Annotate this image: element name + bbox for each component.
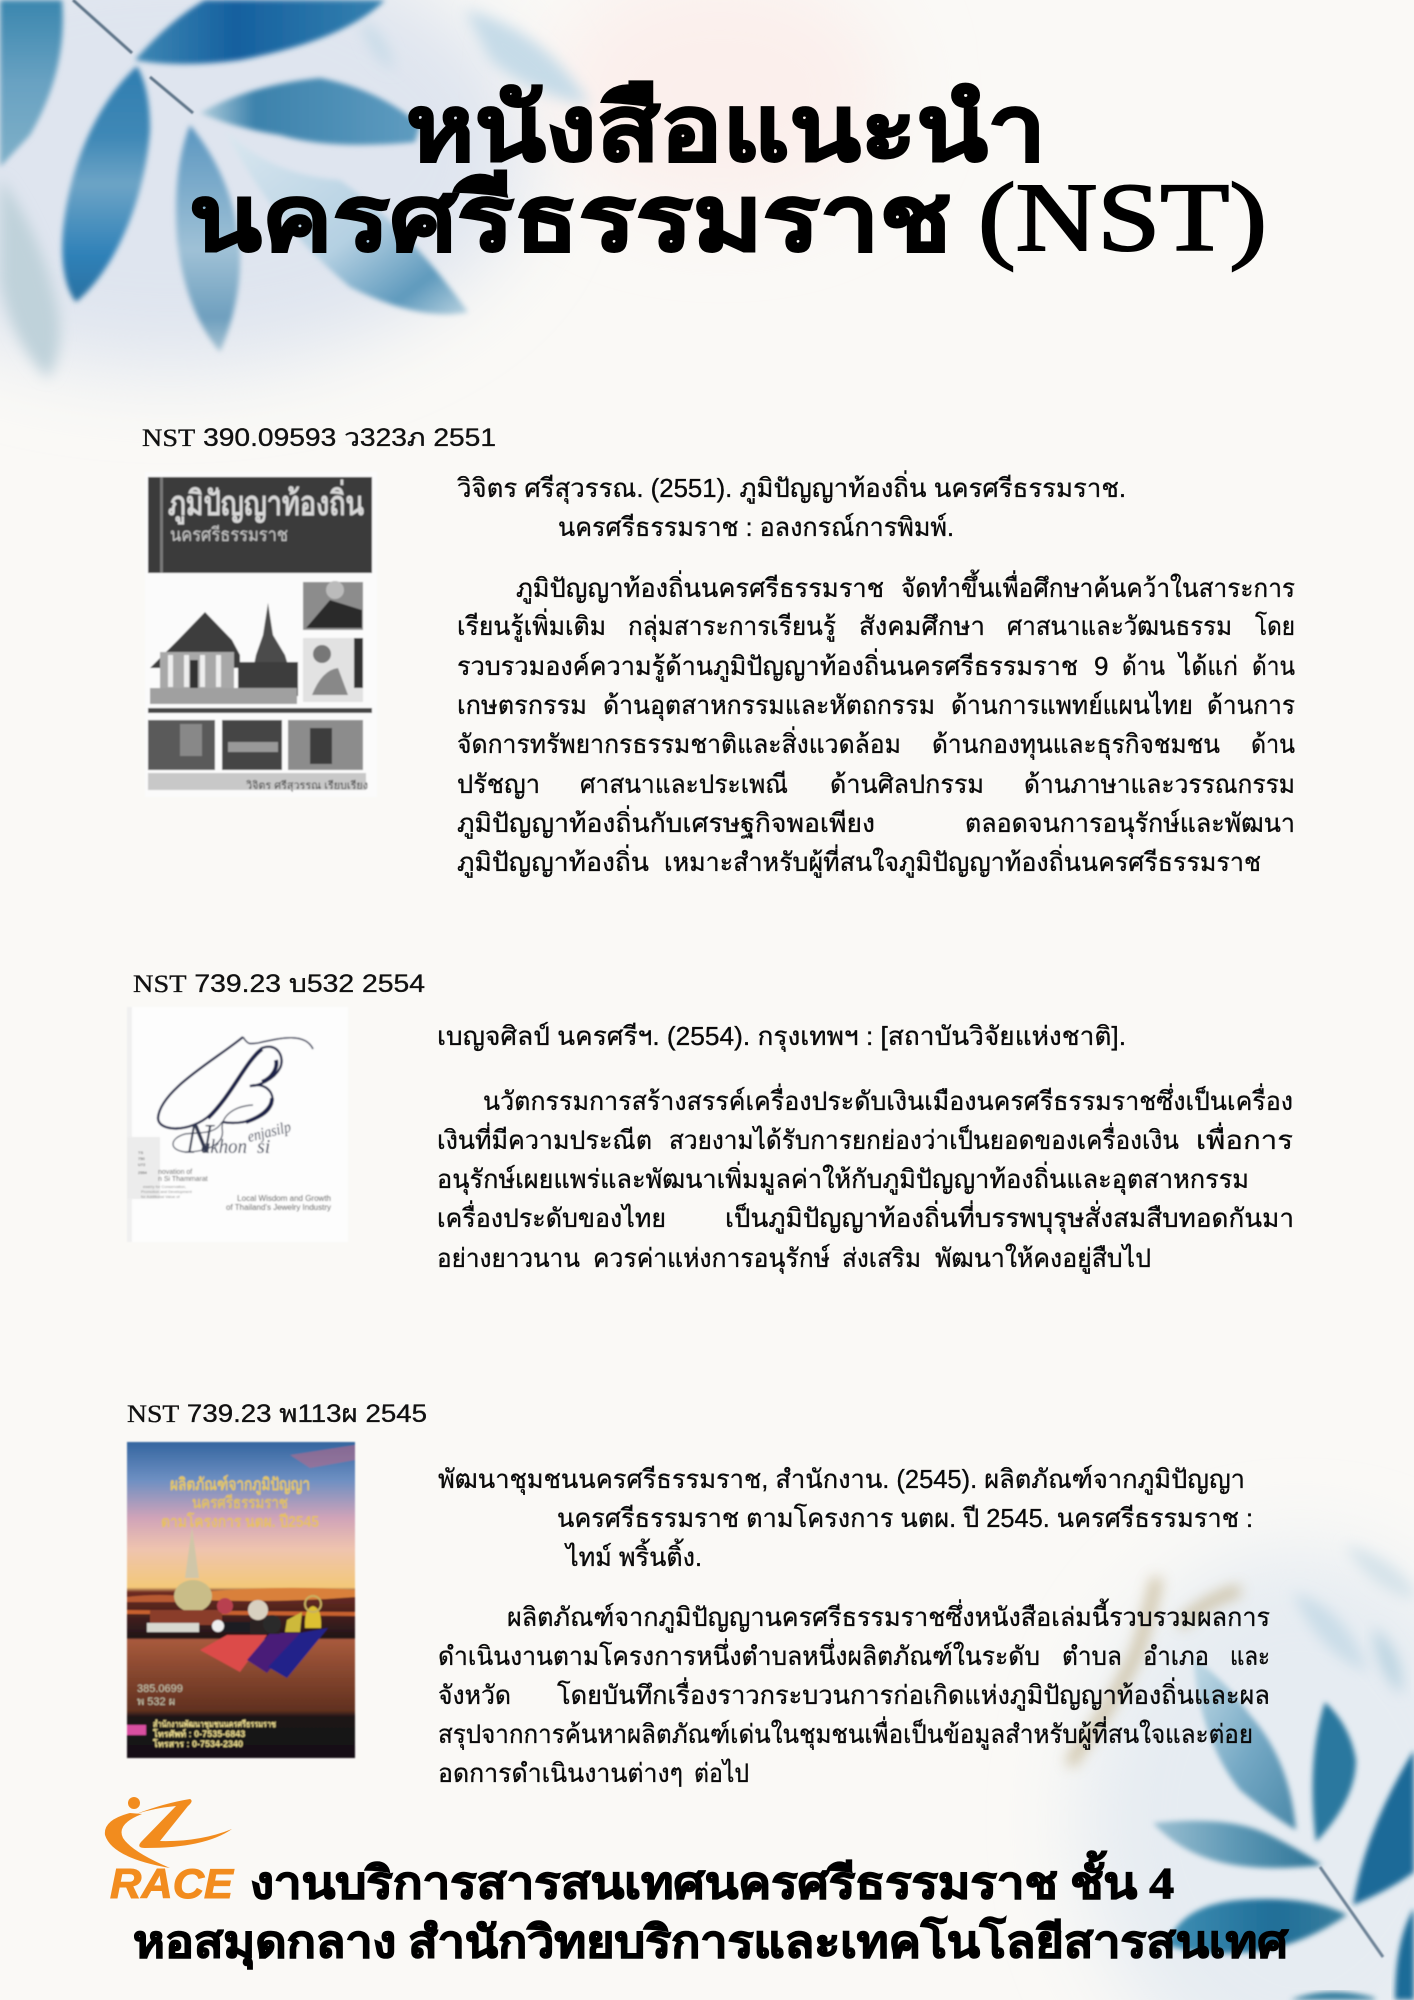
description: book 1: ด้านกองทุนและธุรกิจชมชน (932, 729, 1220, 760)
description: book 1: เกษตรกรรม (457, 690, 587, 720)
footer: library unit (133, 1850, 1289, 1970)
book cover 2: of Thailand's Jewelry Industry (226, 1203, 331, 1212)
description: book 1: ภูมิปัญญาท้องถิ่น (457, 844, 649, 878)
description: book 1: ด้าน (1251, 729, 1295, 759)
call number: book 2: NST 739.23 บ532 2554 (133, 970, 425, 998)
description: book 1: ด้านภาษาและวรรณกรรม (1024, 769, 1295, 799)
description: book 2: เงินที่มีความประณีต (437, 1122, 652, 1155)
description: book 3: ต่อไป (694, 1758, 749, 1788)
description: book 2: ควรค่าแห่งการอนุรักษ์ (593, 1243, 831, 1274)
description: book 3: ดำเนินงานตามโครงการหนึ่งตำบลหนึ่งผลิตภัณฑ์ในระดับ (438, 1638, 1040, 1671)
description: book 3: ตำบล (1062, 1641, 1122, 1671)
call number: book 1: NST 390.09593 ว323ภ 2551 (142, 424, 496, 452)
description: book 2: ส่งเสริม (842, 1243, 921, 1273)
book cover 2 (127, 1007, 348, 1242)
book cover 1 (145, 472, 377, 797)
book cover 3: ผลิตภัณฑ์จากภูมิปัญญา (170, 1474, 310, 1496)
description: book 1: จัดการทรัพยากรธรรมชาติและสิ่งแวดล้อม (457, 726, 901, 759)
book cover 3: นครศรีธรรมราช (192, 1493, 288, 1512)
bibliographic entry: book 1: วิจิตร ศรีสุวรรณ. (2551). ภูมิปัญญาท้องถิ่น นครศรีธรรมราช. (457, 470, 1126, 504)
decoration: bottom-right leaves (1070, 1545, 1414, 2000)
bibliographic entry: book 3: พัฒนาชุมชนนครศรีธรรมราช, สำนักงาน. (2545). ผลิตภัณฑ์จากภูมิปัญญา (438, 1464, 1245, 1495)
book cover 2: N (184, 1117, 215, 1163)
footer: library unit: งานบริการสารสนเทศนครศรีธรรมราช ชั้น 4 (250, 1850, 1174, 1908)
book cover 2: TS (138, 1150, 143, 1155)
bibliographic entry: book 3: ไทม์ พริ้นติ้ง. (564, 1538, 702, 1572)
description: book 1: เหมาะสำหรับผู้ที่สนใจภูมิปัญญาท้องถิ่นนครศรีธรรมราช (664, 844, 1261, 878)
description: book 2: อย่างยาวนาน (437, 1243, 580, 1273)
book cover 3: พ 532 ผ (137, 1696, 175, 1708)
description: book 1: ตลอดจนการอนุรักษ์และพัฒนา (965, 808, 1295, 839)
book cover 3: โทรสาร : 0-7534-2340 (152, 1738, 243, 1749)
book cover 2: ewelry for Conservation, (143, 1184, 186, 1189)
book cover 3: โทรศัพท์ : 0-7535-6843 (152, 1728, 245, 1739)
description: book 1: 9 (1094, 651, 1108, 681)
book cover 1: ภูมิปัญญาท้องถิ่น (168, 479, 364, 525)
book cover 2: U72 (138, 1162, 146, 1167)
description: book 2: พัฒนาให้คงอยู่สืบไป (935, 1243, 1151, 1274)
title (189, 78, 1267, 272)
description: book 2: สวยงามได้รับการยกย่องว่าเป็นยอดของเครื่องเงิน (669, 1122, 1179, 1155)
description: book 3: อดการดำเนินงานต่างๆ (438, 1758, 683, 1788)
book cover 2: enjasilp (246, 1119, 293, 1146)
bibliographic entry: book 1 (457, 470, 1126, 542)
bibliographic entry: book 2: เบญจศิลป์ นครศรีฯ. (2554). กรุงเทพฯ : [สถาบันวิจัยแห่งชาติ]. (437, 1021, 1126, 1052)
book cover 1: นครศรีธรรมราช (170, 524, 288, 546)
description: book 1: ภูมิปัญญาท้องถิ่นกับเศรษฐกิจพอเพียง (457, 805, 875, 839)
book cover 2: Local Wisdom and Growth (237, 1194, 331, 1203)
book cover 2: n Si Thammarat (158, 1176, 208, 1183)
bibliographic entry: book 1: นครศรีธรรมราช : อลงกรณ์การพิมพ์. (558, 512, 954, 542)
description: book 3: โดยบันทึกเรื่องราวกระบวนการก่อเกิดแห่งภูมิปัญญาท้องถิ่นและผล (557, 1677, 1270, 1711)
bibliographic entry: book 3: นครศรีธรรมราช ตามโครงการ นตผ. ปี 2545. นครศรีธรรมราช : (557, 1503, 1253, 1533)
call number: book 3: NST 739.23 พ113ผ 2545 (127, 1400, 427, 1428)
description: book 2: เพื่อการ (1196, 1122, 1293, 1155)
description: book 1: กลุ่มสาระการเรียนรู้ (628, 611, 836, 642)
decoration: top-left leaves (0, 0, 590, 378)
description: book 3: อำเภอ (1143, 1641, 1209, 1671)
description: book 3: สรุปจากการค้นหาผลิตภัณฑ์เด่นในชุมชนเพื่อเป็นข้อมูลสำหรับผู้ที่สนใจและต่อย (438, 1716, 1253, 1750)
description: book 1: โดย (1255, 611, 1295, 641)
bibliographic entry: book 3 (438, 1464, 1253, 1572)
description: book 1: ปรัชญา (457, 769, 540, 799)
description: book 2: เครื่องประดับของไทย (437, 1200, 666, 1233)
title: นครศรีธรรมราช (NST) (189, 164, 1267, 272)
book cover 2: si (257, 1136, 270, 1158)
description: book 1: ภูมิปัญญาท้องถิ่นนครศรีธรรมราช (516, 570, 884, 604)
description: book 1: ได้แก่ (1177, 651, 1238, 681)
description: book 1: เรียนรู้เพิ่มเติม (457, 608, 606, 642)
book cover 3 (127, 1442, 355, 1758)
description: book 2: อนุรักษ์เผยแพร่และพัฒนาเพิ่มมูลค่าให้กับภูมิปัญญาท้องถิ่นและอุตสาหกรรม (437, 1161, 1249, 1195)
description: book 1: ด้าน (1122, 651, 1165, 681)
description: book 1: ด้านการแพทย์แผนไทย (951, 690, 1193, 720)
title: หนังสือแนะนำ (406, 78, 1046, 180)
book cover 2: 750 (138, 1156, 145, 1161)
description: book 3: จังหวัด (438, 1680, 511, 1710)
book cover 2: 2554 (138, 1170, 148, 1175)
description: book 3: ผลิตภัณฑ์จากภูมิปัญญานครศรีธรรมราชซึ่งหนังสือเล่มนี้รวบรวมผลการ (507, 1598, 1270, 1633)
book cover 3: ตามโครงการ นตผ. ปี2545 (161, 1511, 319, 1531)
book cover 2: akhon (201, 1136, 247, 1158)
description: book 2: นวัตกรรมการสร้างสรรค์เครื่องประดับเงินเมืองนครศรีธรรมราชซึ่งเป็นเครื่อง (483, 1083, 1293, 1116)
description: book 1: รวบรวมองค์ความรู้ด้านภูมิปัญญาท้องถิ่นนครศรีธรรมราช (457, 648, 1078, 682)
book cover 3: สำนักงานพัฒนาชุมชนนครศรีธรรมราช (153, 1719, 276, 1730)
book cover 2: Promotion and Development (141, 1189, 193, 1194)
description: book 1: สังคมศึกษา (859, 611, 985, 641)
description: book 1: ด้านการ (1207, 690, 1295, 720)
book cover 2: for Additional Value of (141, 1194, 181, 1199)
book cover 2: novation of (158, 1169, 192, 1176)
logo: RACE: RACE (110, 1860, 235, 1907)
description: book 3: และ (1230, 1641, 1270, 1671)
description: book 1: จัดทำขึ้นเพื่อศึกษาค้นคว้าในสาระการ (901, 569, 1295, 603)
book cover 3: 385.0699 (137, 1683, 183, 1695)
description: book 1: ศาสนาและวัฒนธรรม (1007, 611, 1232, 641)
description: book 2 (437, 1083, 1294, 1274)
book cover 1: วิจิตร ศรีสุวรรณ เรียบเรียง (245, 779, 368, 792)
description: book 1: ด้าน (1252, 651, 1295, 681)
description: book 3 (438, 1598, 1270, 1788)
logo: RACE (105, 1797, 235, 1907)
footer: library unit: หอสมุดกลาง สำนักวิทยบริการและเทคโนโลยีสารสนเทศ (133, 1915, 1289, 1970)
description: book 1: ด้านศิลปกรรม (830, 769, 984, 799)
description: book 1: ด้านอุตสาหกรรมและหัตถกรรม (603, 690, 935, 721)
description: book 1 (457, 569, 1295, 878)
description: book 1: ศาสนาและประเพณี (580, 769, 788, 799)
description: book 2: เป็นภูมิปัญญาท้องถิ่นที่บรรพบุรุษสั่งสมสืบทอดกันมา (725, 1200, 1294, 1234)
